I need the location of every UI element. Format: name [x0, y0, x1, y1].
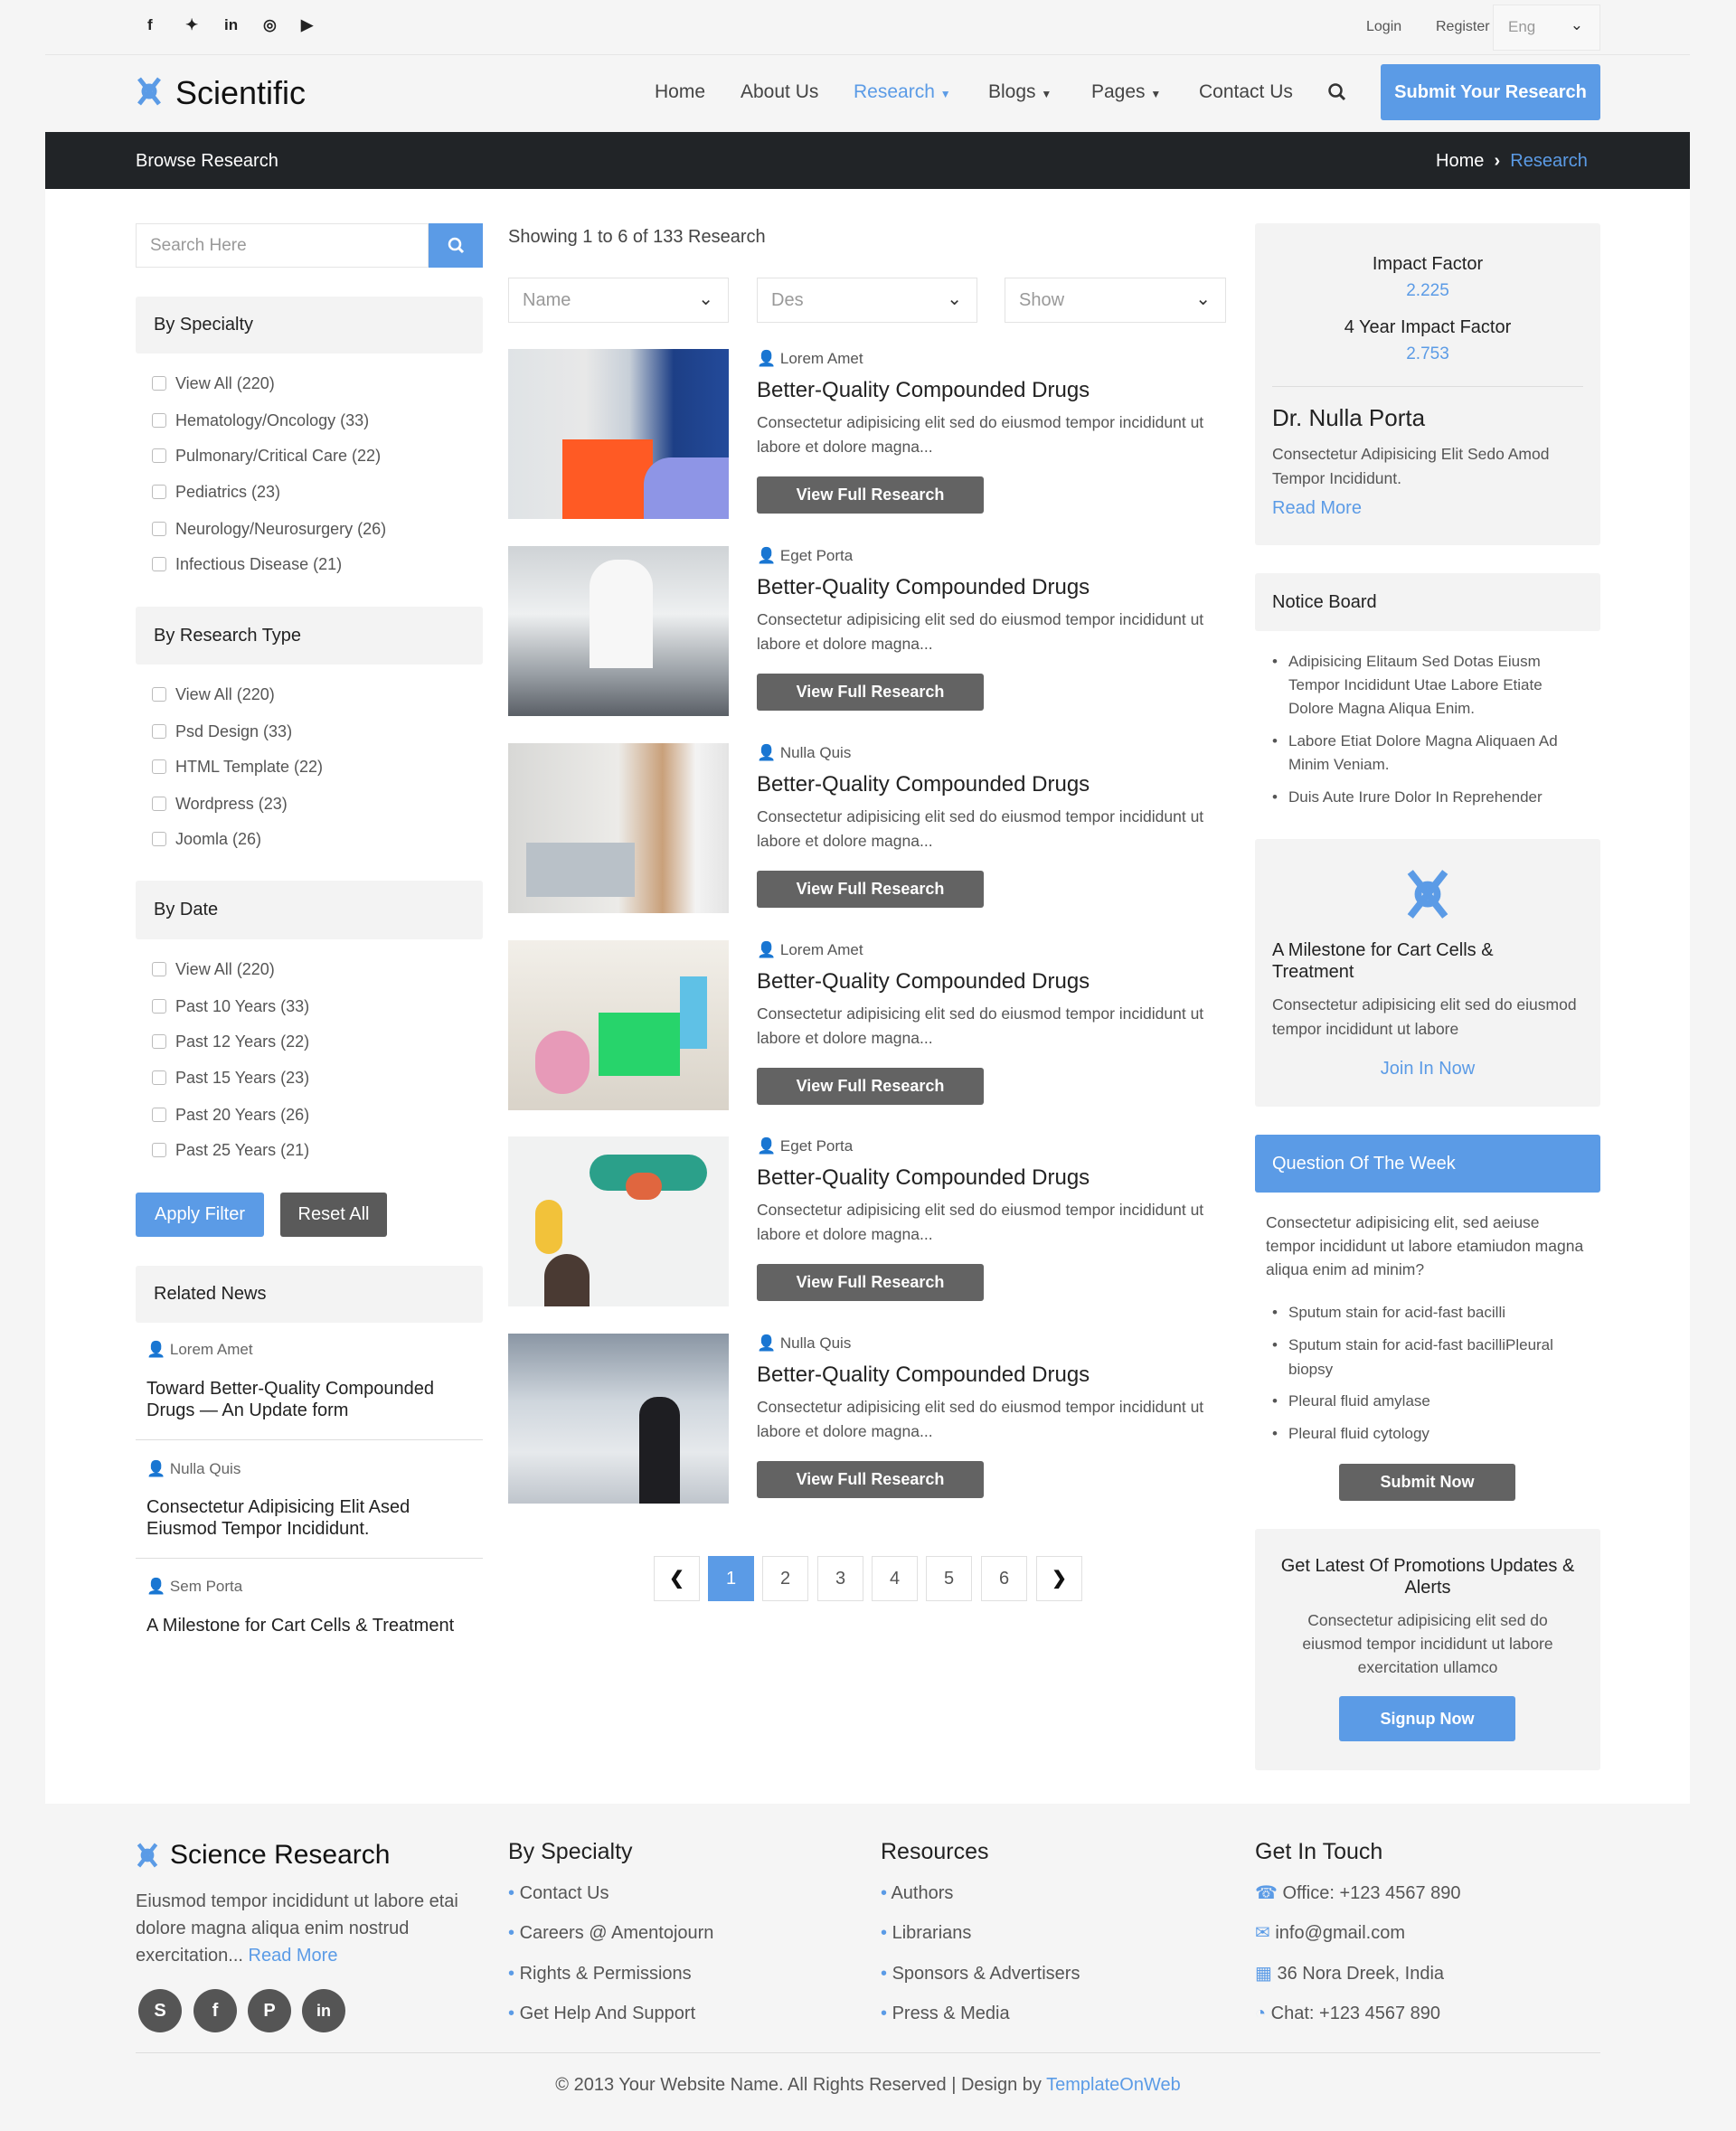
logo: Scientific [175, 74, 306, 111]
pagination: 5 [944, 1569, 954, 1589]
panel: by date: Past 12 Years (22) [175, 1032, 309, 1051]
footer: by specialty: • Rights & Permissions [508, 1964, 692, 1984]
panel: by date: View All (220) [175, 960, 275, 978]
top bar [147, 5, 1600, 51]
panel: by date: Past 15 Years (23) [175, 1069, 309, 1087]
login register: Login [1366, 19, 1401, 34]
panel: related news: 👤 Lorem Amet [146, 1341, 253, 1358]
footer: about: P [263, 2001, 276, 2021]
card 2: Better-Quality Compounded Drugs [757, 575, 1090, 599]
panel: question of the week: Pleural fluid amylase [1288, 1392, 1430, 1410]
sort selects: Name [523, 290, 571, 310]
panel: notice board [1255, 573, 1600, 806]
nav bar: Contact Us [1199, 81, 1293, 102]
card 4 [508, 940, 1203, 1110]
panel: question of the week: Pleural fluid cytology [1288, 1425, 1429, 1442]
panel: notice board: Labore Etiat Dolore Magna Aliquaen Ad Minim Veniam. [1288, 732, 1558, 773]
footer: about: Science Research [170, 1840, 390, 1870]
text: ⌄ [947, 289, 962, 309]
panel: question of the week: Submit Now [1380, 1473, 1474, 1491]
footer: by specialty: By Specialty [508, 1839, 633, 1864]
nav bar [137, 64, 1600, 120]
pagination: 4 [890, 1569, 900, 1589]
footer: get in touch: ✉ info@gmail.com [1255, 1923, 1405, 1943]
language select [1493, 5, 1600, 51]
card 2: View Full Research [797, 683, 944, 701]
copyright: © 2013 Your Website Name. All Rights Reserved | Design by TemplateOnWeb [555, 2075, 1181, 2095]
filter buttons: Reset All [298, 1204, 369, 1224]
main white content area [45, 189, 1690, 1804]
top bar: ◎ [263, 16, 277, 33]
panel: question of the week: • [1272, 1425, 1278, 1442]
pagination: ❮ [669, 1569, 684, 1589]
panel: by specialty: Neurology/Neurosurgery (26) [175, 520, 386, 538]
panel: impact factor: 2.225 [1406, 281, 1449, 300]
footer: by specialty [508, 1839, 713, 2023]
text: ⌄ [1195, 289, 1211, 309]
footer: resources: • Press & Media [881, 2004, 1010, 2023]
footer: about [136, 1840, 458, 2032]
card 1 [508, 349, 1203, 519]
panel: by specialty: Pulmonary/Critical Care (22) [175, 447, 381, 465]
card 5: Better-Quality Compounded Drugs [757, 1165, 1090, 1190]
panel: notice board: Duis Aute Irure Dolor In Reprehender [1288, 788, 1543, 806]
panel: by specialty: Pediatrics (23) [175, 483, 280, 501]
panel: question of the week: • [1272, 1392, 1278, 1410]
top bar: Register [1436, 19, 1490, 34]
panel: by date [136, 881, 483, 1159]
panel: by date: By Date [154, 900, 218, 919]
panel: impact factor: 2.753 [1406, 344, 1449, 363]
panel: by specialty: View All (220) [175, 374, 275, 392]
panel: promotions [1255, 1529, 1600, 1770]
card 5 [508, 1136, 1203, 1306]
panel: by research type [136, 607, 483, 848]
submit button [1381, 64, 1600, 120]
card 5: View Full Research [797, 1273, 944, 1291]
text: Des [771, 290, 804, 310]
card 3 [508, 743, 1203, 913]
panel: related news: Consectetur Adipisicing Elit Ased Eiusmod Tempor Incididunt. [146, 1497, 410, 1539]
panel: milestone: Join In Now [1381, 1059, 1475, 1079]
panel: by date: Past 25 Years (21) [175, 1141, 309, 1159]
sort selects [508, 278, 729, 323]
nav links: Home [655, 81, 705, 102]
panel: by specialty: Infectious Disease (21) [175, 555, 342, 573]
footer: get in touch: Get In Touch [1255, 1839, 1382, 1864]
top bar: ✦ [185, 16, 198, 33]
submit button: Submit Your Research [1394, 82, 1587, 102]
footer: get in touch: ◔ Chat: +123 4567 890 [1255, 2004, 1440, 2023]
footer: about: Eiusmod tempor incididunt ut labore etai dolore magna aliqua enim nostrud exercitation... Read More [136, 1891, 458, 1966]
panel: by research type: Psd Design (33) [175, 722, 292, 740]
footer: about: in [316, 2002, 331, 2020]
card 6: View Full Research [797, 1470, 944, 1488]
search icon [1328, 83, 1345, 100]
footer: resources: • Sponsors & Advertisers [881, 1964, 1080, 1984]
text: Show [1019, 290, 1064, 310]
card 6 [508, 1334, 1203, 1504]
panel: related news: 👤 Nulla Quis [146, 1460, 241, 1477]
social circles [138, 1989, 182, 2032]
card 3: Better-Quality Compounded Drugs [757, 772, 1090, 797]
panel: milestone [1255, 839, 1600, 1107]
nav bar: Blogs ▼ [988, 81, 1052, 102]
footer: by specialty: • Contact Us [508, 1883, 609, 1903]
panel: impact factor [1255, 223, 1600, 545]
pagination: 1 [726, 1569, 736, 1589]
panel: impact factor: 4 Year Impact Factor [1344, 317, 1511, 337]
pagination: 6 [999, 1569, 1009, 1589]
panel: impact factor: Read More [1272, 498, 1362, 518]
card 4: View Full Research [797, 1077, 944, 1095]
panel: impact factor: Dr. Nulla Porta [1272, 404, 1425, 431]
breadcrumb bar: Home › Research [1436, 151, 1588, 171]
breadcrumb bar: Browse Research [136, 151, 278, 171]
panel: by research type: Wordpress (23) [175, 795, 288, 813]
nav bar: About Us [741, 81, 818, 102]
pagination: 3 [835, 1569, 845, 1589]
panel: notice board: • [1272, 732, 1278, 750]
panel: question of the week: • [1272, 1304, 1278, 1321]
pagination: 2 [780, 1569, 790, 1589]
social circles: S [154, 2001, 166, 2021]
panel: question of the week [1255, 1135, 1600, 1501]
card 1: View Full Research [797, 486, 944, 504]
panel: notice board: • [1272, 788, 1278, 806]
card 6: 👤 Nulla Quis [757, 1334, 851, 1352]
panel: by specialty [136, 297, 483, 573]
card 1: Consectetur adipisicing elit sed do eiusmod tempor incididunt ut labore et dolore magna... [757, 413, 1203, 456]
icon: logo mark [1407, 870, 1448, 919]
panel: related news [136, 1266, 483, 1636]
filter buttons [136, 1193, 387, 1237]
social icons [147, 16, 314, 33]
footer: resources: • Librarians [881, 1923, 971, 1943]
filter buttons: Apply Filter [155, 1204, 245, 1224]
panel: question of the week: Sputum stain for acid-fast bacilli [1288, 1304, 1505, 1321]
panel: promotions: Signup Now [1380, 1710, 1474, 1728]
panel: related news: A Milestone for Cart Cells & Treatment [146, 1616, 454, 1636]
top bar: ▶ [301, 16, 313, 33]
card 1: 👤 Lorem Amet [757, 350, 863, 367]
breadcrumb bar [45, 132, 1690, 189]
panel: by research type: By Research Type [154, 626, 301, 646]
card 6: Consectetur adipisicing elit sed do eiusmod tempor incididunt ut labore et dolore magna... [757, 1398, 1203, 1440]
footer: resources: • Authors [881, 1883, 953, 1903]
card 2 [508, 546, 1203, 716]
card 2: Consectetur adipisicing elit sed do eiusmod tempor incididunt ut labore et dolore magna... [757, 610, 1203, 653]
panel: related news: Related News [154, 1284, 267, 1304]
panel: related news: Toward Better-Quality Compounded Drugs — An Update form [146, 1379, 434, 1420]
card 5: Consectetur adipisicing elit sed do eiusmod tempor incididunt ut labore et dolore magna... [757, 1201, 1203, 1243]
footer: about: f [212, 2001, 218, 2021]
panel: related news: 👤 Sem Porta [146, 1578, 242, 1595]
card 6: Better-Quality Compounded Drugs [757, 1363, 1090, 1387]
panel: by specialty: By Specialty [154, 315, 253, 335]
footer: by specialty: • Careers @ Amentojourn [508, 1923, 713, 1943]
top bar: f [147, 16, 153, 33]
panel: notice board: • [1272, 653, 1278, 670]
panel: by specialty: Hematology/Oncology (33) [175, 411, 369, 429]
nav bar: Research ▼ [854, 81, 951, 102]
panel: by research type: HTML Template (22) [175, 758, 323, 776]
panel: promotions: Get Latest Of Promotions Updates & Alerts [1281, 1556, 1574, 1598]
footer: by specialty: • Get Help And Support [508, 2004, 695, 2023]
results heading: Showing 1 to 6 of 133 Research [508, 227, 766, 247]
panel: by research type: View All (220) [175, 685, 275, 703]
sort selects: ⌄ [698, 289, 713, 309]
panel: milestone: A Milestone for Cart Cells & Treatment [1272, 940, 1494, 982]
panel: milestone: Consectetur adipisicing elit sed do eiusmod tempor incididunt ut labore [1272, 995, 1577, 1038]
panel: impact factor: Consectetur Adipisicing Elit Sedo Amod Tempor Incididunt. [1272, 445, 1549, 487]
panel: question of the week: • [1272, 1336, 1278, 1353]
footer: resources: Resources [881, 1839, 989, 1864]
search field: Search Here [150, 236, 247, 255]
footer: get in touch: ▦ 36 Nora Dreek, India [1255, 1964, 1444, 1984]
footer: resources [881, 1839, 1080, 2023]
panel: question of the week: Sputum stain for acid-fast bacilliPleural biopsy [1288, 1336, 1553, 1378]
footer: get in touch [1255, 1839, 1461, 2023]
search field [136, 223, 429, 268]
card 5: 👤 Eget Porta [757, 1137, 853, 1155]
card 3: Consectetur adipisicing elit sed do eiusmod tempor incididunt ut labore et dolore magna... [757, 807, 1203, 850]
card 4: Consectetur adipisicing elit sed do eiusmod tempor incididunt ut labore et dolore magna... [757, 1004, 1203, 1047]
panel: by date: Past 20 Years (26) [175, 1106, 309, 1124]
card 3: 👤 Nulla Quis [757, 744, 851, 761]
card 4: Better-Quality Compounded Drugs [757, 969, 1090, 994]
card 2: 👤 Eget Porta [757, 547, 853, 564]
card 1: Better-Quality Compounded Drugs [757, 378, 1090, 402]
panel: by date: Past 10 Years (33) [175, 997, 309, 1015]
language select: Eng [1508, 18, 1535, 35]
card 4: 👤 Lorem Amet [757, 941, 863, 958]
left sidebar [136, 223, 483, 268]
panel: by research type: Joomla (26) [175, 830, 261, 848]
card 3: View Full Research [797, 880, 944, 898]
pagination: ❯ [1052, 1569, 1067, 1589]
panel: question of the week: Consectetur adipisicing elit, sed aeiuse tempor incididunt ut labore etamiudon magna aliqua enim ad minim? [1266, 1213, 1583, 1278]
nav bar: Pages ▼ [1091, 81, 1161, 102]
panel: question of the week: Question Of The Week [1272, 1154, 1456, 1174]
footer: get in touch: ☎ Office: +123 4567 890 [1255, 1883, 1461, 1903]
panel: notice board: Notice Board [1272, 592, 1377, 612]
panel: promotions: Consectetur adipisicing elit sed do eiusmod tempor incididunt ut labore exercitation ullamco [1302, 1611, 1553, 1676]
top bar: in [224, 16, 238, 33]
panel: notice board: Adipisicing Elitaum Sed Dotas Eiusm Tempor Incididunt Utae Labore Etiate Dolore Magna Aliqua Enim. [1288, 653, 1543, 717]
panel: impact factor: Impact Factor [1373, 254, 1483, 274]
language select: ⌄ [1571, 16, 1583, 33]
pagination [654, 1556, 1082, 1601]
